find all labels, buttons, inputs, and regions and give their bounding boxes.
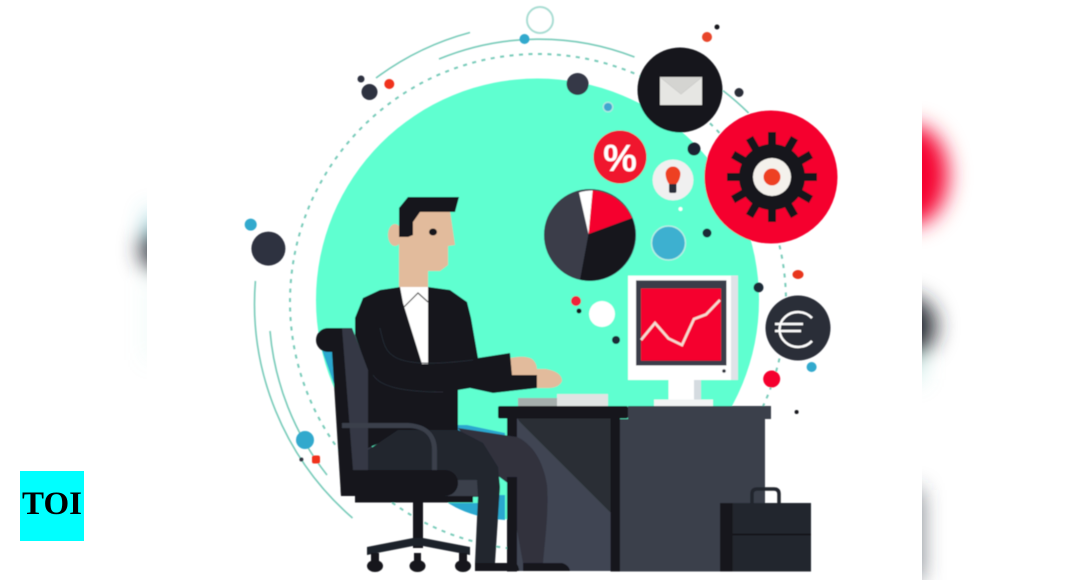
icon: envelope badge	[638, 48, 722, 132]
man: rear leg	[458, 428, 570, 571]
TOI logo badge: TOI	[22, 486, 82, 522]
desk top, keyboard and right body	[498, 394, 771, 572]
main illustration	[245, 7, 837, 572]
icon: euro badge	[766, 296, 830, 360]
briefcase	[720, 489, 811, 572]
TOI logo badge	[20, 471, 84, 541]
blurred backdrop: left edge	[123, 202, 147, 287]
man: suit jacket and shirt	[355, 287, 537, 448]
icon: percent badge	[594, 130, 646, 184]
pie chart	[544, 189, 636, 281]
blurred backdrop: right edge	[922, 109, 966, 580]
blue circle	[652, 226, 686, 260]
mint background circle	[316, 78, 759, 522]
icon: percent badge: %	[603, 138, 637, 180]
chair back	[316, 328, 385, 496]
man: front leg	[368, 430, 519, 571]
icon: gear badge	[704, 110, 838, 244]
monitor with line chart	[628, 276, 738, 406]
man: hands	[510, 357, 562, 388]
scattered dots	[245, 24, 817, 464]
top ring	[527, 7, 553, 33]
orbit lines	[255, 32, 786, 550]
man: head	[388, 197, 459, 292]
chair base and casters	[367, 500, 471, 572]
desk rear panel	[507, 418, 611, 572]
chair blue shell	[322, 350, 505, 520]
chair seat and arm rest	[340, 423, 473, 502]
icon: light bulb badge	[652, 160, 694, 200]
